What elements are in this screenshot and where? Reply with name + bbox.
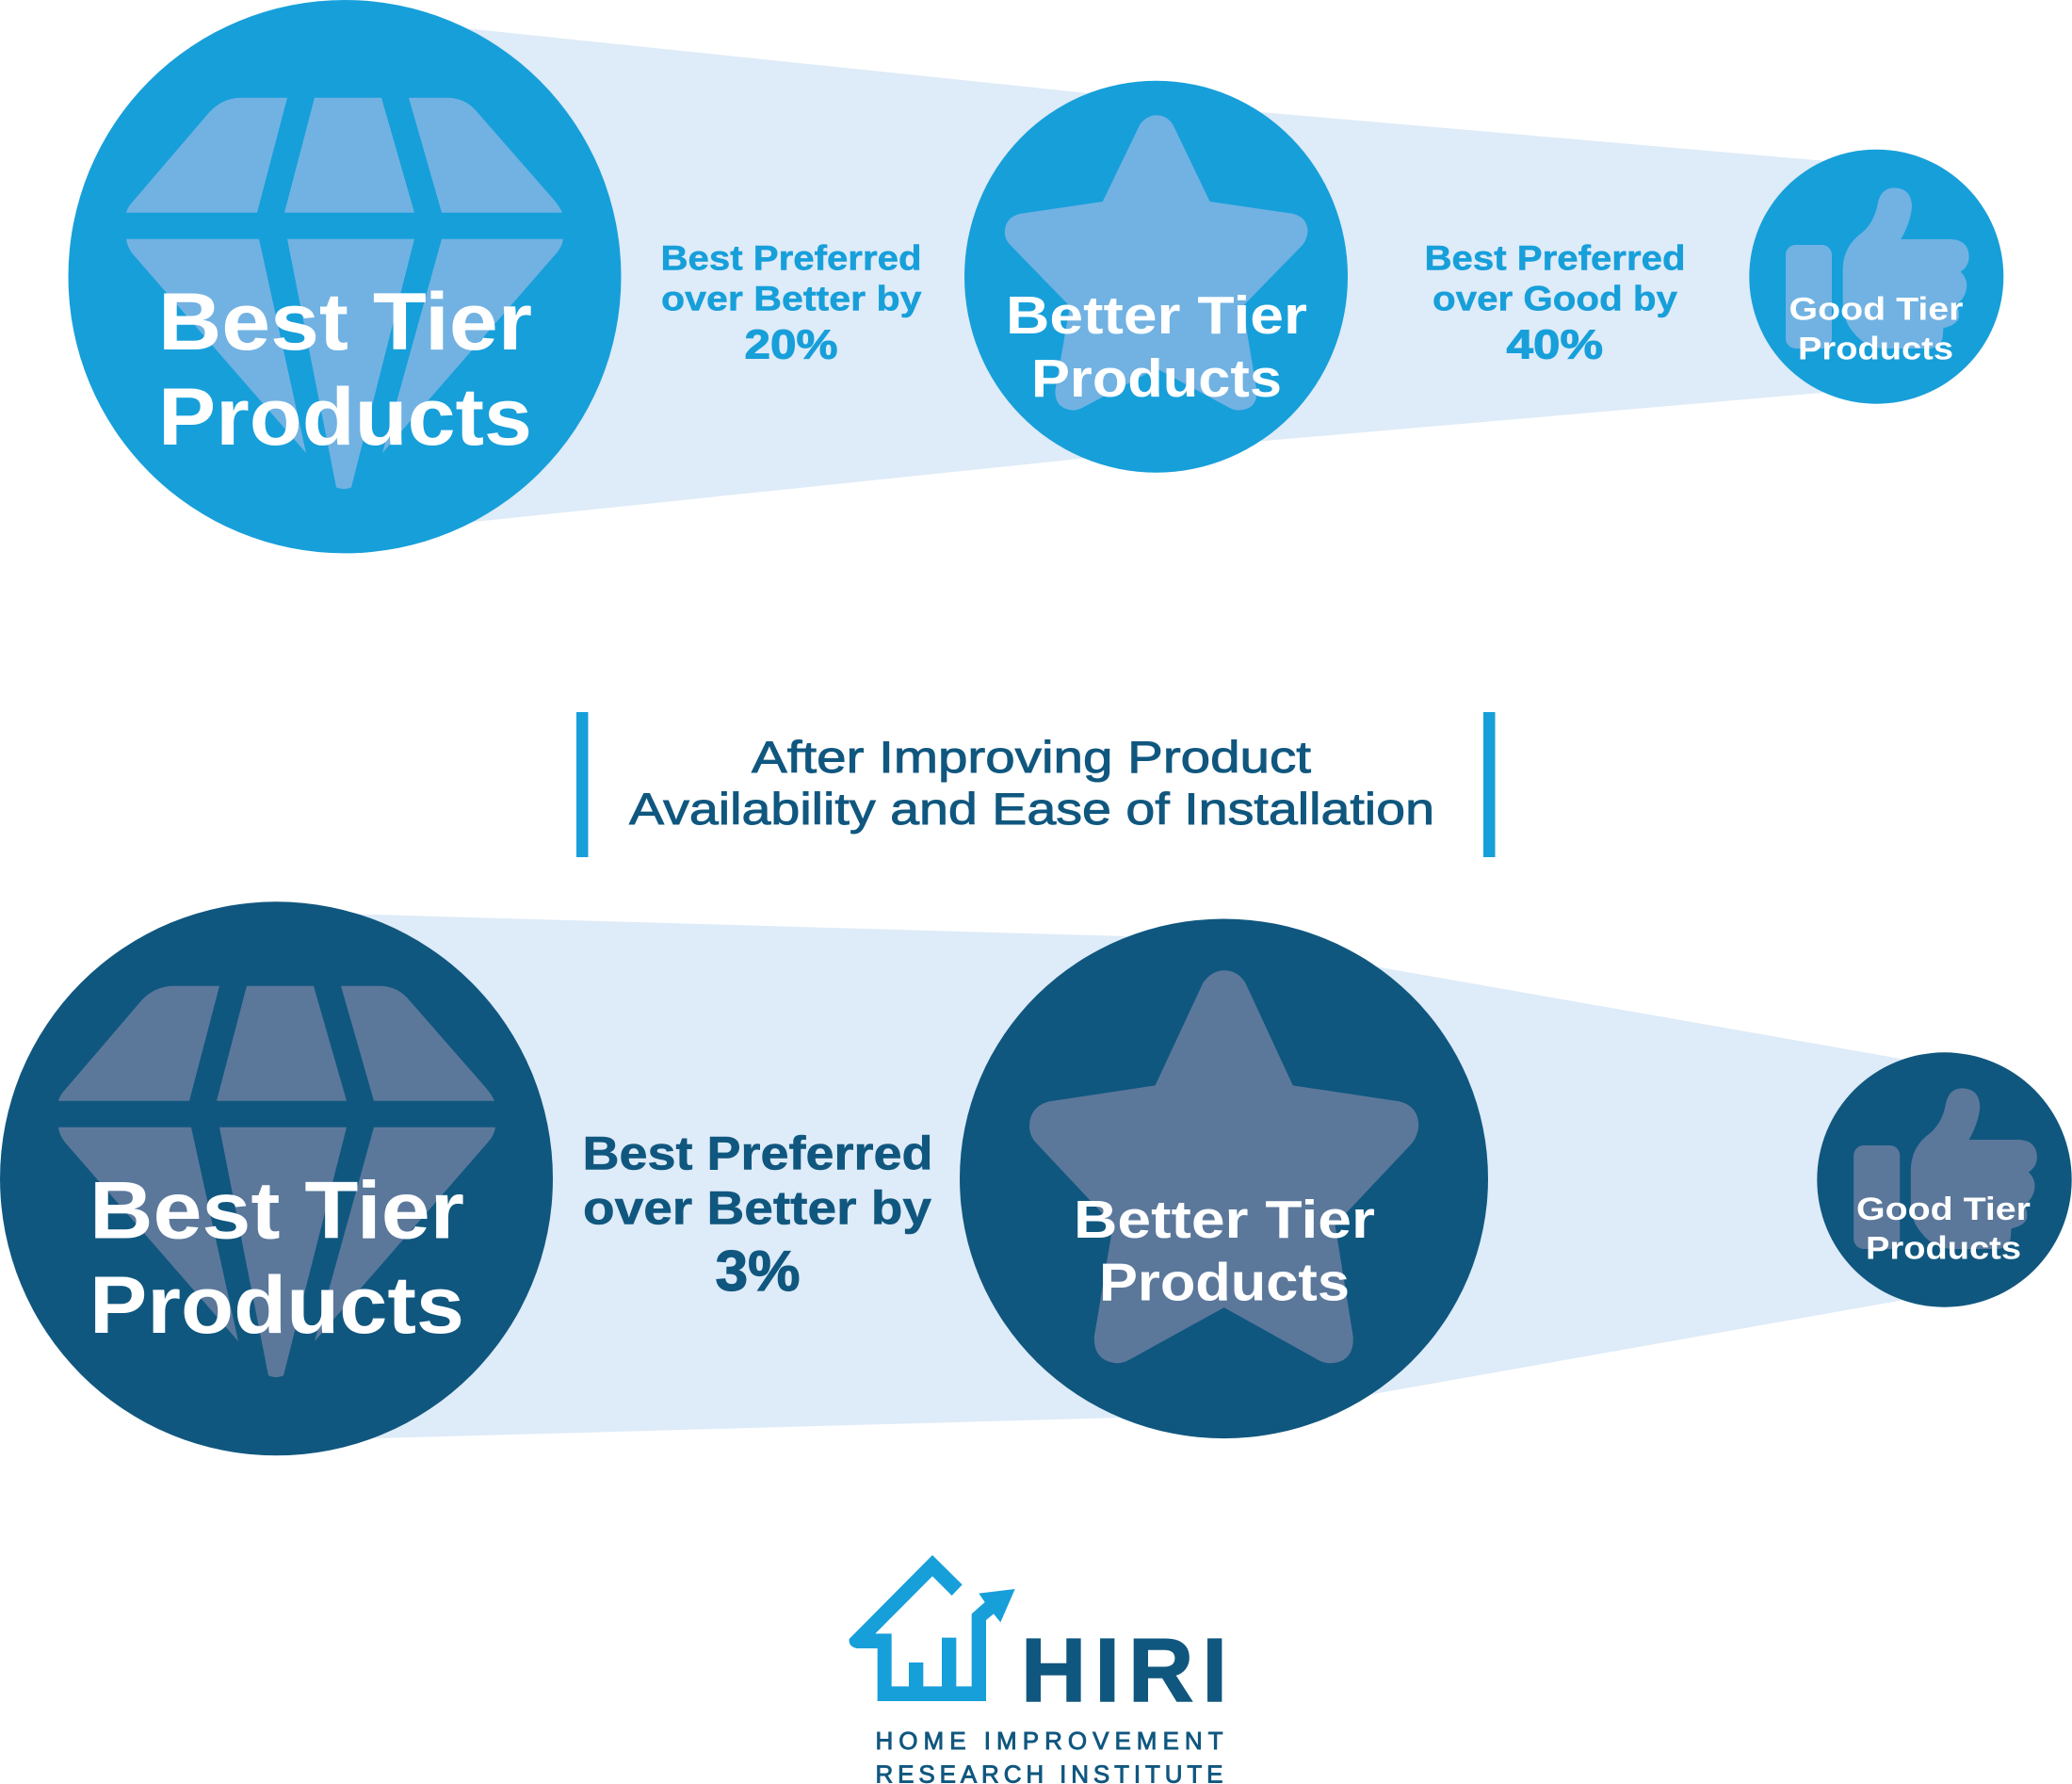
heading text: After Improving Product [752, 732, 1311, 782]
good tier circle [1817, 1052, 2072, 1307]
heading text: Availability and Ease of Installation [629, 784, 1434, 834]
best tier circle [68, 0, 622, 553]
icon: diamond [58, 986, 495, 1377]
label: best tier products [89, 1165, 464, 1351]
icon: diamond [126, 98, 563, 489]
tagline [876, 1727, 1223, 1784]
cone: best to better [276, 912, 1224, 1441]
left divider bar [576, 712, 588, 857]
callout: best over better 20%: Best Preferred [661, 239, 921, 278]
good tier circle [1749, 150, 2003, 404]
label: best tier products: Products [89, 1260, 464, 1351]
label: good tier products [1789, 291, 1963, 367]
label: good tier products: Good Tier [1856, 1192, 2031, 1227]
better tier circle [964, 81, 1348, 473]
callout: best over good 40% [1424, 239, 1686, 368]
heading text [629, 732, 1434, 834]
tagline: HOME IMPROVEMENT [876, 1727, 1223, 1755]
callout: best over better 3% [582, 1127, 932, 1303]
icon: thumbs up [1853, 1088, 2037, 1249]
cone: better to good [1224, 940, 1944, 1420]
heading: after improving [576, 712, 1496, 857]
label: good tier products: Good Tier [1789, 291, 1963, 327]
callout: best over better 20% [661, 239, 922, 368]
label: good tier products: Products [1798, 332, 1953, 367]
label: better tier products: Better Tier [1074, 1190, 1375, 1250]
callout: best over better 3%: Best Preferred [582, 1127, 932, 1180]
label: good tier products: Products [1866, 1231, 2021, 1267]
label: better tier products: Better Tier [1006, 285, 1307, 346]
callout: best over better 3%: 3% [716, 1240, 801, 1303]
callout: best over better 20%: 20% [744, 322, 838, 368]
best tier circle [0, 901, 553, 1455]
right divider bar [1483, 712, 1496, 857]
panel: after improvements [0, 901, 2072, 1455]
callout: best over better 20%: over Better by [661, 279, 922, 317]
icon: house with bar chart and arrow [850, 1555, 1015, 1701]
callout: best over good 40%: Best Preferred [1424, 239, 1686, 278]
callout: best over good 40%: over Good by [1433, 279, 1677, 317]
wordmark: HIRI [1021, 1620, 1227, 1721]
label: better tier products: Products [1099, 1253, 1350, 1313]
label: better tier products: Products [1031, 349, 1282, 409]
cone: best to better [345, 16, 1156, 535]
icon: thumbs up [1786, 187, 1969, 349]
label: best tier products [158, 277, 532, 462]
label: better tier products [1006, 285, 1307, 409]
better tier circle [960, 919, 1488, 1438]
callout: best over better 3%: over Better by [583, 1181, 931, 1234]
label: good tier products [1856, 1192, 2031, 1267]
logo: HIRI [850, 1555, 1227, 1784]
panel: before improvements [68, 0, 2003, 553]
callout: best over good 40%: 40% [1507, 322, 1603, 368]
label: best tier products: Best Tier [89, 1165, 464, 1256]
label: better tier products [1074, 1190, 1375, 1313]
label: best tier products: Best Tier [158, 277, 532, 367]
label: best tier products: Products [158, 372, 532, 462]
cone: better to good [1156, 103, 1876, 450]
icon: star [1005, 115, 1308, 411]
icon: star [1029, 970, 1418, 1363]
